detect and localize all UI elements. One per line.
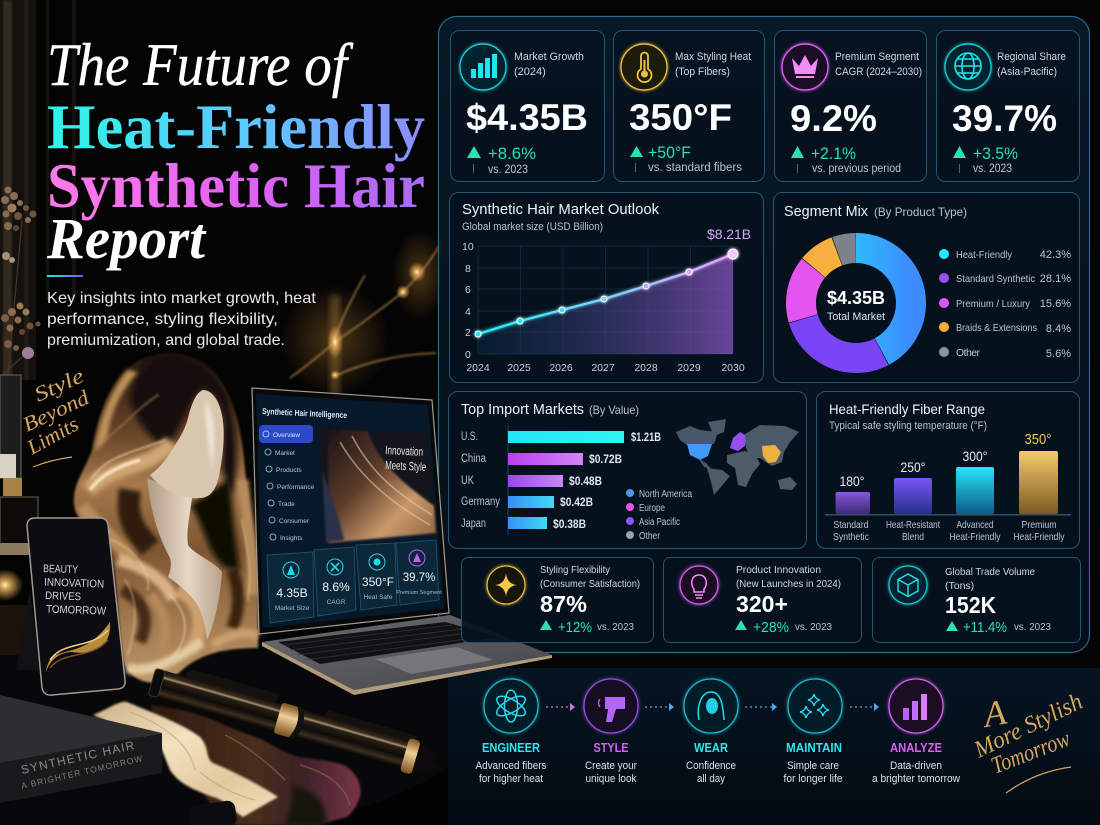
- axis labels: 2029: [677, 362, 701, 374]
- illustration: smartphone on stand: [16, 518, 125, 695]
- bar chart: safe temperature by fiber: Heat-Resistant: [886, 519, 940, 531]
- panel: KPI max styling heat: [614, 30, 764, 182]
- step: engineer: for higher heat: [479, 773, 543, 785]
- illustration: hair swatches on table: [93, 702, 360, 825]
- donut legend: 28.1%: [1040, 273, 1071, 285]
- icon: sparkle: [487, 566, 525, 604]
- panel: top import markets: [448, 392, 806, 548]
- step: wear: Confidence: [686, 760, 736, 772]
- donut legend: 15.6%: [1040, 298, 1071, 310]
- subtitle text: performance, styling flexibility,: [47, 311, 278, 328]
- accent rule: [47, 275, 83, 277]
- axis labels: 4: [465, 306, 471, 318]
- illustration: smartphone on stand: INNOVATION: [44, 577, 104, 591]
- map legend: North America: [639, 489, 692, 500]
- world map: [676, 419, 799, 495]
- screen stat tiles: 39.7%: [403, 572, 435, 584]
- panel: product innovation: 320+: [736, 591, 788, 617]
- step: maintain: [784, 679, 842, 785]
- step: maintain: Simple care: [787, 760, 839, 772]
- panel: KPI max styling heat: 350°F: [629, 97, 732, 138]
- panel: styling flexibility: [462, 558, 654, 642]
- bar chart: safe temperature by fiber: 250°: [900, 459, 926, 475]
- screen sidebar: Consumer: [279, 518, 310, 525]
- bar chart: import value by market: $0.38B: [553, 519, 586, 531]
- axis labels: [462, 241, 745, 374]
- donut legend: 42.3%: [1040, 249, 1071, 261]
- donut legend: Heat-Friendly: [956, 249, 1013, 261]
- screen hero image: Meets Style: [385, 458, 427, 474]
- area fill: [478, 254, 733, 354]
- axis labels: 2028: [634, 362, 658, 374]
- dark crown: [130, 354, 236, 495]
- step: style: Create your: [585, 760, 637, 772]
- icon: light bulb: [680, 566, 718, 604]
- panel: heat-friendly fiber range: Heat-Friendly Fiber Range: [829, 401, 985, 417]
- phone gold hair swoosh: [46, 622, 110, 672]
- panel: KPI regional share: +3.5%: [973, 144, 1018, 163]
- axis labels: 2024: [466, 362, 490, 374]
- bar chart: import value by market: $1.21B: [631, 432, 661, 444]
- step: maintain: MAINTAIN: [786, 741, 842, 755]
- panel: KPI max styling heat: vs. standard fibers: [648, 162, 742, 174]
- icon: crown: [782, 44, 828, 90]
- panel: KPI premium segment CAGR: [774, 30, 926, 182]
- blond swatch: [93, 702, 278, 817]
- bar chart: safe temperature by fiber: Premium: [1022, 519, 1057, 531]
- script slogan: Style Beyond Limits: Beyond: [19, 385, 93, 437]
- step: style: STYLE: [594, 741, 628, 755]
- step: analyze: Data-driven: [890, 760, 942, 772]
- axis labels: 2: [465, 327, 471, 339]
- donut legend: Premium / Luxury: [956, 298, 1031, 310]
- panel: KPI market growth: [450, 30, 604, 182]
- panel: segment mix donut: (By Product Type): [874, 205, 967, 219]
- laptop keyboard: [278, 622, 500, 664]
- arrow: style to wear: [645, 703, 674, 711]
- bar chart: safe temperature by fiber: 180°: [840, 473, 864, 489]
- panel: global trade volume: [872, 558, 1080, 642]
- step: style: [584, 679, 638, 785]
- bar chart: import value by market: Japan: [461, 518, 486, 530]
- donut legend: Standard Synthetic: [956, 273, 1035, 285]
- panel: segment mix donut: Segment Mix: [784, 203, 868, 220]
- donut legend: 8.4%: [1046, 323, 1071, 335]
- icon: sparkles: [788, 679, 842, 733]
- title: Report: [46, 206, 207, 271]
- donut legend: [939, 249, 1071, 360]
- panel: KPI max styling heat: (Top Fibers): [675, 66, 730, 78]
- step: engineer: ENGINEER: [482, 741, 540, 755]
- bar chart: safe temperature by fiber: Standard: [834, 519, 869, 531]
- panel: main dashboard background: [438, 16, 1090, 652]
- map legend: Europe: [639, 503, 665, 514]
- donut center label: $4.35B: [827, 288, 885, 308]
- subtitle text: [47, 290, 317, 349]
- axis labels: 2025: [507, 362, 531, 374]
- title: [46, 32, 425, 271]
- icon: thermometer: [621, 44, 667, 90]
- screen sidebar: [259, 425, 315, 542]
- donut center label: Total Market: [827, 311, 885, 323]
- laptop base: [262, 615, 552, 690]
- screen stat tiles: CAGR: [327, 599, 346, 606]
- screen stat tiles: 4.35B: [276, 586, 308, 600]
- bar chart: import value by market: $0.72B: [589, 454, 622, 466]
- panel: KPI max styling heat: +50°F: [648, 143, 691, 162]
- axis labels: 8: [465, 263, 471, 275]
- script slogan: Style Beyond Limits: [19, 363, 93, 467]
- illustration: black handle on table: [189, 800, 238, 825]
- hair strands: [92, 395, 250, 660]
- panel: KPI market growth: Market Growth: [514, 51, 584, 63]
- donut legend: Other: [956, 347, 980, 359]
- arrow: engineer to style: [546, 703, 575, 711]
- arrow: wear to maintain: [745, 703, 777, 711]
- bar chart: safe temperature by fiber: Advanced: [956, 519, 994, 531]
- panel: bottom process strip background: [448, 668, 1100, 825]
- illustration: smartphone on stand: DRIVES: [45, 590, 81, 603]
- illustration: book: SYNTHETIC HAIR: [20, 738, 137, 777]
- chart grid: [478, 246, 733, 354]
- donut legend: Braids & Extensions: [956, 322, 1037, 334]
- arrow: maintain to analyze: [850, 703, 879, 711]
- screen stat tiles: Market Size: [275, 605, 310, 612]
- script slogan: A More Stylish Tomorrow: [969, 689, 1087, 793]
- data points: [475, 249, 738, 337]
- icon: cube: [889, 566, 927, 604]
- panel: styling flexibility: 87%: [540, 591, 587, 617]
- panel: product innovation: +28%: [753, 620, 789, 636]
- panel: global trade volume: Global Trade Volume: [945, 566, 1035, 578]
- bar chart: import value by market: [461, 425, 661, 535]
- subtitle text: Key insights into market growth, heat: [47, 290, 317, 307]
- illustration: smartphone on stand: BEAUTY: [43, 563, 79, 576]
- axis labels: 2027: [591, 362, 615, 374]
- icon: hair dryer: [584, 679, 638, 733]
- axis labels: 10: [462, 241, 474, 253]
- panel: top import markets: (By Value): [589, 403, 639, 417]
- icon: rising bars: [460, 44, 506, 90]
- script slogan: A More Stylish Tomorrow: More Stylish: [969, 689, 1087, 764]
- screen stat tiles: 350°F: [362, 575, 394, 589]
- bar chart: safe temperature by fiber: Heat-Friendly: [950, 531, 1001, 543]
- map legend: Other: [639, 531, 661, 542]
- panel: market outlook line chart: [450, 192, 764, 382]
- donut legend: 5.6%: [1046, 348, 1071, 360]
- title: The Future of: [47, 32, 354, 98]
- bar chart: safe temperature by fiber: 300°: [962, 448, 988, 464]
- bar chart: import value by market: $0.48B: [569, 476, 602, 488]
- illustration: laptop: [252, 388, 552, 695]
- laptop screen: [252, 388, 449, 634]
- table surface: [0, 650, 448, 825]
- panel: KPI premium segment CAGR: vs. previous period: [812, 163, 901, 175]
- panel: KPI regional share: Regional Share: [997, 51, 1066, 63]
- icon: atom: [484, 679, 538, 733]
- step: engineer: Advanced fibers: [476, 760, 547, 772]
- panel: KPI market growth: $4.35B: [466, 97, 588, 138]
- step: maintain: for longer life: [784, 773, 842, 785]
- decor: dried flowers: [1, 186, 40, 375]
- script slogan: Style Beyond Limits: Limits: [22, 412, 83, 460]
- screen sidebar: Performance: [277, 484, 315, 491]
- step: wear: [684, 679, 738, 785]
- title: Synthetic Hair: [47, 150, 425, 221]
- panel: KPI regional share: 39.7%: [952, 98, 1057, 139]
- trend line: [478, 254, 733, 334]
- screen stat tiles: Heat Safe: [364, 594, 393, 601]
- dark and plum swatch: [150, 705, 360, 825]
- map legend: [626, 489, 692, 542]
- panel: KPI market growth: (2024): [514, 66, 546, 78]
- screen sidebar: Overview: [273, 432, 300, 439]
- script slogan: A More Stylish Tomorrow: A: [978, 691, 1010, 735]
- decor: perfume bottle: [0, 478, 38, 655]
- panel: product innovation: [664, 558, 862, 642]
- illustration: curling iron: [147, 659, 453, 784]
- panel: styling flexibility: Styling Flexibility: [540, 564, 611, 576]
- axis labels: 2030: [721, 362, 745, 374]
- panel: KPI premium segment CAGR: Premium Segment: [835, 51, 919, 63]
- hair wave layers: [82, 480, 258, 670]
- panel: KPI premium segment CAGR: +2.1%: [811, 144, 856, 163]
- step: wear: all day: [697, 773, 725, 785]
- panel: KPI regional share: (Asia-Pacific): [997, 66, 1057, 78]
- panel: KPI premium segment CAGR: 9.2%: [790, 98, 877, 139]
- screen hero image: [318, 428, 436, 543]
- screen stat tiles: [267, 540, 442, 623]
- illustration: smartphone on stand: TOMORROW: [46, 604, 107, 618]
- tan outer edge of crown: [95, 370, 138, 452]
- panel: market outlook line chart: $8.21B: [707, 226, 751, 242]
- script slogan: Style Beyond Limits: Style: [30, 363, 88, 407]
- bar chart: safe temperature by fiber: Synthetic: [833, 531, 869, 543]
- title: Heat-Friendly: [47, 91, 425, 162]
- screen sidebar: Products: [276, 467, 302, 474]
- step: engineer: [476, 679, 547, 785]
- panel: styling flexibility: (Consumer Satisfaction): [540, 578, 640, 590]
- swept highlight band: [88, 442, 172, 490]
- dark hair behind neck: [190, 478, 240, 570]
- panel: KPI max styling heat: Max Styling Heat: [675, 51, 751, 63]
- screen stat tiles: Premium Segment: [396, 590, 442, 596]
- panel: product innovation: vs. 2023: [795, 621, 832, 633]
- screen sidebar: Trade: [278, 501, 295, 508]
- subtitle text: premiumization, and global trade.: [47, 332, 285, 349]
- illustration: book: A BRIGHTER TOMORROW: [20, 753, 144, 791]
- bar chart: safe temperature by fiber: [825, 432, 1071, 543]
- panel: KPI market growth: vs. 2023: [488, 164, 528, 176]
- donut center label: [827, 288, 885, 323]
- panel: market outlook line chart: Synthetic Hair Market Outlook: [462, 201, 659, 218]
- decor: glass vase with candle: [0, 375, 21, 478]
- panel: top import markets: Top Import Markets: [461, 401, 584, 418]
- icon: globe: [945, 44, 991, 90]
- screen stat tiles: 8.6%: [322, 580, 350, 594]
- panel: heat-friendly fiber range: Typical safe styling temperature (°F): [829, 420, 987, 432]
- illustration: book: [0, 695, 162, 803]
- bar chart: import value by market: U.S.: [461, 431, 478, 443]
- light flares: [280, 285, 390, 395]
- bar chart: safe temperature by fiber: 350°: [1024, 432, 1052, 448]
- panel: product innovation: Product Innovation: [736, 564, 821, 576]
- illustration: wig on mannequin: [74, 353, 258, 682]
- screen sidebar: Market: [275, 450, 295, 457]
- donut chart: [801, 248, 911, 358]
- mannequin neck and bust: [147, 478, 222, 640]
- screen hero image: Innovation: [385, 443, 423, 459]
- axis labels: 6: [465, 284, 471, 296]
- step: analyze: ANALYZE: [890, 741, 942, 755]
- panel: KPI market growth: +8.6%: [488, 144, 536, 163]
- axis labels: 2026: [549, 362, 573, 374]
- panel: market outlook line chart: Global market size (USD Billion): [462, 221, 603, 233]
- panel: product innovation: (New Launches in 2024): [736, 578, 841, 590]
- icon: woman with hair: [684, 679, 738, 733]
- axis labels: 0: [465, 349, 471, 361]
- panel: global trade volume: +11.4%: [963, 620, 1007, 636]
- panel: global trade volume: 152K: [945, 592, 996, 618]
- panel: global trade volume: (Tons): [945, 580, 974, 592]
- bar chart: import value by market: Germany: [461, 496, 500, 508]
- screen title: Synthetic Hair Intelligence: [262, 406, 348, 420]
- panel: KPI premium segment CAGR: CAGR (2024–2030): [835, 66, 922, 78]
- step: analyze: [872, 679, 960, 785]
- bar chart: import value by market: China: [461, 453, 486, 465]
- step: style: unique look: [586, 773, 637, 785]
- panel: styling flexibility: vs. 2023: [597, 621, 634, 633]
- mannequin face: [150, 390, 224, 498]
- panel: styling flexibility: +12%: [558, 620, 592, 636]
- step: wear: WEAR: [694, 741, 728, 755]
- bar chart: import value by market: UK: [461, 475, 474, 487]
- bar chart: safe temperature by fiber: Blend: [902, 531, 924, 543]
- map legend: Asia Pacific: [639, 517, 680, 528]
- panel: heat-friendly fiber range: [816, 392, 1080, 548]
- script slogan: A More Stylish Tomorrow: Tomorrow: [988, 726, 1074, 780]
- panel: KPI regional share: vs. 2023: [973, 163, 1012, 175]
- panel: KPI regional share: [936, 30, 1080, 182]
- bar chart: safe temperature by fiber: Heat-Friendly: [1014, 531, 1065, 543]
- step: analyze: a brighter tomorrow: [872, 773, 960, 785]
- icon: bars: [889, 679, 943, 733]
- wig hair mass: [74, 353, 258, 682]
- bar chart: import value by market: $0.42B: [560, 497, 593, 509]
- panel: segment mix donut: [774, 192, 1080, 382]
- screen sidebar: Insights: [280, 535, 303, 542]
- panel: global trade volume: vs. 2023: [1014, 621, 1051, 633]
